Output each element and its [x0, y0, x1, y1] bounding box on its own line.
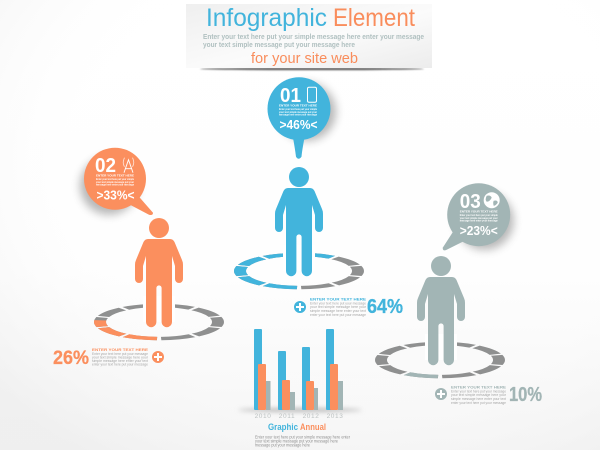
ring: orange 26% — [100, 296, 218, 339]
bars 2010 — [254, 329, 270, 410]
body text: Enter your text here put your message — [92, 352, 148, 356]
body text: simple message here enter your text — [310, 309, 366, 313]
number: 02 — [95, 155, 116, 177]
ring: blue 64% — [240, 245, 358, 288]
chart title — [268, 422, 326, 433]
chart caption — [255, 434, 350, 448]
body text: simple message here enter your text — [92, 359, 148, 363]
percentage: >23%< — [460, 224, 498, 238]
bubble shape — [268, 77, 330, 159]
bubble text: ENTER YOUR TEXT HERE — [279, 104, 317, 108]
body text — [310, 302, 367, 317]
callout: 26% — [53, 347, 164, 369]
title accent: Element — [333, 4, 415, 32]
year labels: 2010 — [255, 413, 271, 420]
body text: enter your text here put your message — [92, 362, 148, 366]
body text: your text simple message here your — [451, 393, 507, 397]
title: Infographic — [206, 4, 327, 32]
chart caption: your text simple message put your message here — [255, 438, 338, 444]
body text — [451, 390, 507, 405]
chart title: Graphic — [268, 422, 298, 433]
bubble text: Enter your text here put your simple — [279, 107, 317, 111]
person: grey — [417, 256, 465, 365]
bubble text: message here enter your message — [96, 183, 134, 187]
bubble text: ENTER YOUR TEXT HERE — [460, 210, 498, 214]
icon: plus — [152, 351, 164, 363]
bubble text: your text simple message put your — [96, 180, 135, 184]
subtitle text: your text simple message put your message here — [203, 42, 355, 49]
bubble shadow — [456, 192, 514, 250]
bubble text: message here enter your message — [460, 219, 498, 223]
bars 2013 — [326, 329, 343, 410]
bubble 01 — [268, 77, 336, 159]
bubble shadow — [278, 83, 336, 141]
year labels — [255, 413, 343, 420]
chart base shadow — [238, 408, 362, 412]
bubble text: Enter your text here put your simple — [96, 177, 134, 181]
subtitle text: Enter your text here put your simple message here enter your message — [203, 34, 424, 41]
bubble 03 — [443, 183, 514, 250]
body text: enter your text here put your message — [310, 313, 366, 317]
chart caption: Enter your text here put your simple message here enter — [255, 434, 350, 440]
bubble shape — [443, 183, 510, 250]
title banner — [186, 4, 432, 70]
heading: ENTER YOUR TEXT HERE — [451, 384, 506, 390]
banner panel — [186, 4, 432, 68]
icon: antenna — [123, 158, 134, 173]
body text: simple message here enter your text — [451, 397, 506, 401]
bubble text: your text simple message put your — [460, 216, 498, 220]
bar chart — [238, 329, 362, 420]
bars 2011 — [278, 351, 295, 410]
percentage: >46%< — [280, 118, 318, 132]
callout: 64% — [294, 296, 403, 318]
body text: your text simple message here your — [92, 356, 149, 360]
number: 01 — [280, 85, 301, 107]
number: 03 — [460, 191, 481, 213]
value: 26% — [53, 347, 89, 369]
icon: plus — [435, 388, 447, 400]
bubble text: Enter your text here put your simple — [460, 213, 498, 217]
icon: phone — [308, 87, 316, 102]
year labels: 2013 — [327, 413, 343, 420]
body text: enter your text here put your message — [451, 401, 506, 405]
icon: globe — [484, 192, 500, 208]
body text: Enter your text here put your message — [451, 390, 506, 394]
chart title: Annual — [300, 422, 326, 433]
banner shadow — [200, 68, 424, 70]
callout: 10% — [435, 384, 542, 406]
bubble 02 — [80, 148, 153, 215]
heading: ENTER YOUR TEXT HERE — [310, 296, 366, 302]
bubble shadow — [80, 157, 138, 215]
chart caption: message put your message here — [255, 442, 310, 448]
year labels: 2011 — [279, 413, 295, 420]
bars 2012 — [302, 347, 318, 410]
bubble text: message here enter your message — [279, 113, 317, 117]
tagline: for your site web — [251, 50, 358, 67]
year labels: 2012 — [303, 413, 319, 420]
subtitle text — [203, 34, 424, 49]
bubble shape — [84, 148, 153, 215]
value: 64% — [367, 296, 403, 318]
value: 10% — [509, 384, 542, 406]
body text: Enter your text here put your message — [310, 302, 366, 306]
icon: plus — [294, 301, 306, 313]
bubble text: your text simple message put your — [279, 110, 318, 114]
bubble text — [460, 210, 498, 223]
bubble text — [279, 104, 318, 117]
percentage: >33%< — [96, 189, 134, 203]
bubble text — [96, 174, 135, 187]
body text: your text simple message here your — [310, 305, 367, 309]
ring: grey 10% — [381, 334, 499, 377]
person: blue — [275, 167, 323, 276]
heading: ENTER YOUR TEXT HERE — [92, 347, 148, 352]
person: orange — [135, 218, 183, 327]
bubble text: ENTER YOUR TEXT HERE — [96, 174, 134, 178]
body text — [92, 352, 149, 366]
